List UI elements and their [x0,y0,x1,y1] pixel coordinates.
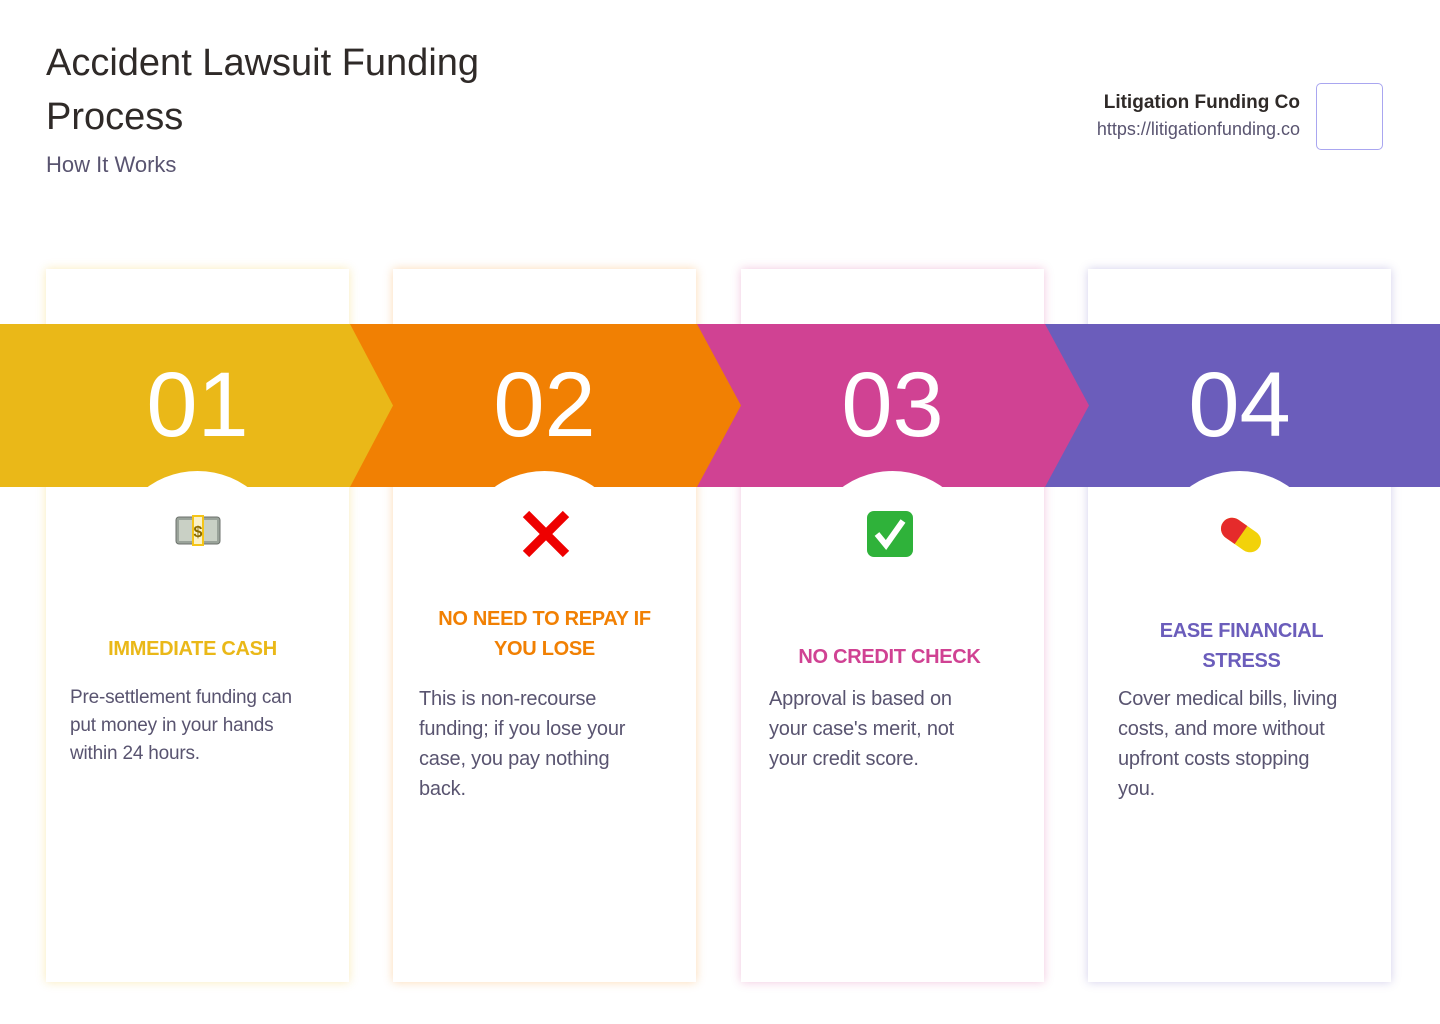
body 2: case, you pay nothing [419,748,609,770]
title: Process [46,96,183,138]
body 1: within 24 hours. [70,743,200,764]
body 3: Approval is based on [769,688,952,710]
card 1 [46,269,349,982]
body 2 [419,688,626,800]
heading 2: YOU LOSE [494,638,595,660]
body 2: funding; if you lose your [419,718,625,740]
heading 2 [438,608,651,660]
body 4: upfront costs stopping [1118,748,1309,770]
body 4 [1118,688,1337,800]
number 01: 01 [146,354,249,456]
body 2: This is non-recourse [419,688,596,710]
subtitle: How It Works [46,152,176,177]
body 4: costs, and more without [1118,718,1325,740]
heading 1: IMMEDIATE CASH [108,638,277,660]
brand url: https://litigationfunding.co [1097,119,1300,139]
number 04: 04 [1188,354,1291,456]
title [46,42,479,138]
body 3 [769,688,954,770]
brand block [1097,83,1383,150]
body 2: back. [419,778,466,800]
panel 1 text [70,638,292,764]
body 1 [70,687,292,764]
body 3: your credit score. [769,748,919,770]
icon: check box [867,511,913,557]
card 3 [741,269,1044,982]
number 02: 02 [493,354,596,456]
heading 4: STRESS [1202,650,1281,672]
icon: money: $ [194,524,203,541]
icon: money [176,515,220,546]
icon: pill [1221,518,1261,552]
brand name: Litigation Funding Co [1104,92,1300,113]
card 4 [1088,269,1391,982]
body 3: your case's merit, not [769,718,954,740]
icon: red cross [522,510,570,558]
card 2 [393,269,696,982]
panel 2 text [419,608,651,800]
logo box [1316,83,1383,150]
body 4: you. [1118,778,1155,800]
heading 4: EASE FINANCIAL [1160,620,1323,642]
number 03: 03 [841,354,944,456]
heading 4 [1160,620,1323,672]
panel 4 text [1118,620,1337,800]
panel 3 text [769,646,981,770]
body 1: put money in your hands [70,715,273,736]
heading 3: NO CREDIT CHECK [798,646,981,668]
body 4: Cover medical bills, living [1118,688,1337,710]
title: Accident Lawsuit Funding [46,42,479,84]
body 1: Pre-settlement funding can [70,687,292,708]
heading 2: NO NEED TO REPAY IF [438,608,651,630]
